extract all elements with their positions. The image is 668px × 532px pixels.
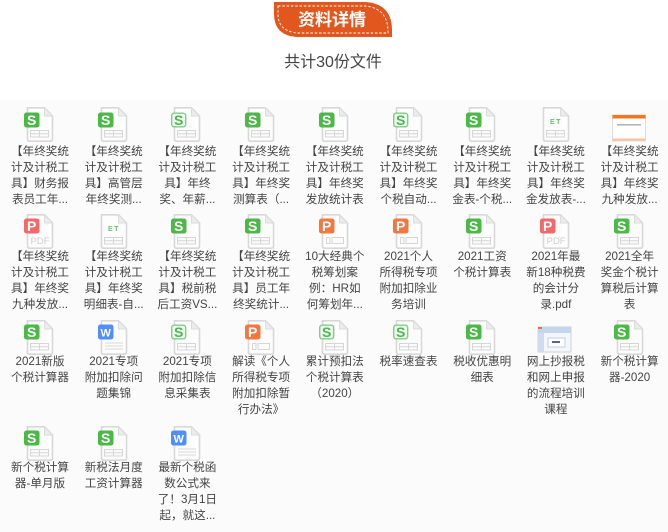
- file: row 2 column 3: [157, 214, 217, 311]
- file: row 2 column 1: 计及计税工: [11, 266, 69, 279]
- file: row 2 column 2: ET: [108, 226, 120, 233]
- file: row 2 column 9: 奖金个税计: [601, 266, 659, 279]
- file: row 3 column 3: 息采集表: [164, 387, 211, 400]
- file: row 2 column 4: [232, 214, 290, 311]
- file: row 1 column 3: 奖、年薪...: [159, 193, 215, 206]
- file: row 1 column 4: 测算表（...: [233, 193, 289, 206]
- file: row 2 column 9: S: [617, 218, 626, 234]
- file: row 3 column 9: [601, 320, 659, 384]
- file: row 3 column 5: 个税计算表: [306, 371, 364, 384]
- file: row 4 column 1: 新个税计算: [11, 461, 69, 474]
- file: row 2 column 7: 个税计算表: [453, 266, 511, 279]
- file: row 3 column 7: 细表: [471, 371, 494, 384]
- file: row 1 column 9: 【年终奖统: [601, 145, 659, 158]
- file: row 2 column 6: 务培训: [391, 298, 426, 311]
- file: row 2 column 3: 【年终奖统: [158, 250, 216, 263]
- file: row 3 column 4: [232, 320, 290, 416]
- file: row 1 column 4: 【年终奖统: [232, 145, 290, 158]
- file: row 2 column 9: 2021全年: [605, 250, 654, 263]
- file: row 1 column 9: [601, 114, 659, 206]
- file: row 1 column 5: S: [322, 112, 331, 128]
- file: row 2 column 1: 具】年终奖: [11, 282, 69, 295]
- file: row 2 column 8: PDF: [546, 236, 566, 247]
- file: row 3 column 5: S: [322, 324, 331, 340]
- file: row 2 column 7: S: [469, 218, 479, 234]
- file: row 3 column 3: S: [174, 324, 184, 340]
- file: row 2 column 1: 九种发放...: [12, 298, 68, 311]
- subtitle: 共计30份文件: [284, 54, 382, 71]
- file: row 3 column 8: 网上抄报税: [527, 355, 585, 368]
- banner heading: [274, 2, 392, 37]
- file: row 1 column 9: 具】年终奖: [601, 177, 659, 190]
- file: row 1 column 8: 金发放表-...: [526, 193, 586, 206]
- file: row 3 column 7: 税收优惠明: [453, 355, 511, 368]
- file: row 2 column 4: 具】员工年: [232, 282, 290, 295]
- file: row 2 column 8: 新18种税费: [526, 266, 586, 279]
- file: row 1 column 5: 发放统计表: [306, 193, 364, 206]
- file: row 1 column 1: 具】财务报: [11, 177, 69, 190]
- file: row 3 column 4: P: [248, 324, 257, 340]
- file: row 2 column 7: [453, 214, 511, 279]
- file: row 1 column 5: [306, 107, 364, 206]
- file: row 2 column 8: 的会计分: [533, 282, 579, 295]
- file: row 1 column 3: [158, 107, 216, 206]
- file: row 1 column 6: 具】年终奖: [380, 177, 437, 190]
- file: row 2 column 8: P: [543, 218, 552, 234]
- file: row 2 column 2: 具】年终奖: [85, 282, 143, 295]
- file: row 2 column 1: PDF: [30, 236, 50, 247]
- file: row 1 column 9: 九种发放...: [602, 193, 658, 206]
- file: row 2 column 4: S: [248, 218, 257, 234]
- file: row 2 column 8: 2021年最: [531, 250, 580, 263]
- file: row 1 column 6: 【年终奖统: [380, 145, 437, 158]
- file: row 3 column 3: 2021专项: [163, 355, 212, 368]
- file: row 2 column 4: 计及计税工: [232, 266, 290, 279]
- file: row 3 column 8: 的流程培训: [527, 387, 585, 400]
- file: row 1 column 7: S: [469, 112, 479, 128]
- file: row 2 column 1: P: [27, 218, 36, 234]
- file: row 2 column 6: P: [396, 218, 405, 234]
- file: row 4 column 3: 起，就这...: [159, 509, 215, 522]
- file: row 3 column 2: 2021专项: [89, 355, 138, 368]
- file: row 4 column 2: S: [101, 430, 110, 446]
- file: row 3 column 9: 新个税计算: [601, 355, 659, 368]
- file: row 2 column 5: 10大经典个: [305, 250, 364, 263]
- file: row 4 column 3: 了！3月1日: [158, 493, 217, 506]
- file: row 3 column 2: 附加扣除问: [85, 371, 143, 384]
- file: row 1 column 4: 计及计税工: [232, 161, 290, 174]
- file: row 3 column 3: 附加扣除信: [158, 371, 216, 384]
- file: row 2 column 1: 【年终奖统: [11, 250, 69, 263]
- file: row 2 column 8: 录.pdf: [540, 298, 571, 311]
- file: row 3 column 2: 题集锦: [96, 387, 131, 400]
- file: row 3 column 1: 个税计算器: [11, 371, 69, 384]
- file: row 1 column 7: 金表-个税...: [452, 193, 512, 206]
- file: row 1 column 2: 年终奖测...: [86, 193, 142, 206]
- file: row 3 column 7: S: [469, 324, 479, 340]
- file: row 1 column 2: S: [101, 112, 110, 128]
- file: row 3 column 5: [306, 320, 364, 400]
- file: row 3 column 1: S: [27, 324, 36, 340]
- file: row 3 column 7: [453, 320, 511, 384]
- file: row 1 column 9: 计及计税工: [601, 161, 659, 174]
- file: row 3 column 6: [380, 320, 437, 368]
- file: row 1 column 4: S: [248, 112, 257, 128]
- file: row 4 column 3: 数公式来: [164, 477, 211, 490]
- file: row 1 column 8: 具】年终奖: [527, 177, 585, 190]
- file: row 3 column 8: [527, 326, 585, 416]
- file: row 2 column 3: 计及计税工: [158, 266, 216, 279]
- file: row 1 column 3: 【年终奖统: [158, 145, 216, 158]
- file: row 2 column 8: [526, 214, 586, 311]
- file: row 1 column 1: 表员工年...: [12, 193, 68, 206]
- file: row 3 column 5: 累计预扣法: [306, 355, 364, 368]
- file: row 1 column 3: S: [174, 112, 184, 128]
- file: row 2 column 5: 何筹划年...: [307, 298, 363, 311]
- file: row 3 column 8: 课程: [544, 403, 567, 416]
- file: row 2 column 5: P: [322, 218, 331, 234]
- file: row 1 column 6: 个税自动...: [380, 193, 437, 206]
- file: row 2 column 7: 2021工资: [458, 250, 507, 263]
- file: row 3 column 6: 税率速查表: [380, 355, 437, 368]
- file: row 1 column 3: 具】年终: [164, 177, 211, 190]
- file: row 2 column 4: 【年终奖统: [232, 250, 290, 263]
- file: row 1 column 8: 计及计税工: [527, 161, 585, 174]
- file: row 3 column 9: 器-2020: [609, 371, 650, 384]
- file: row 3 column 6: S: [396, 324, 405, 340]
- file: row 2 column 1: [11, 214, 69, 311]
- file: row 2 column 6: 附加扣除业: [380, 282, 437, 295]
- file: row 2 column 6: 所得税专项: [380, 266, 437, 279]
- file: row 2 column 5: 税筹划案: [312, 266, 358, 279]
- file: row 4 column 3: [158, 426, 217, 522]
- file: row 1 column 7: 【年终奖统: [453, 145, 511, 158]
- file: row 3 column 9: S: [617, 324, 626, 340]
- file: row 4 column 3: W: [174, 434, 185, 446]
- file: row 2 column 9: 算税后计算: [601, 282, 659, 295]
- file: row 2 column 6: 2021个人: [384, 250, 433, 263]
- file: row 2 column 5: 例：HR如: [309, 282, 361, 295]
- file: row 4 column 1: S: [27, 430, 36, 446]
- file: row 2 column 9: [601, 214, 659, 311]
- file: row 3 column 4: 行办法》: [238, 403, 284, 416]
- file: row 4 column 3: 最新个税函: [158, 461, 216, 474]
- file: row 2 column 3: 后工资VS...: [157, 298, 217, 311]
- file: row 1 column 6: 计及计税工: [380, 161, 437, 174]
- file: row 1 column 7: [452, 107, 512, 206]
- file: row 1 column 5: 【年终奖统: [306, 145, 364, 158]
- file: row 1 column 8: ET: [550, 119, 562, 126]
- file: row 1 column 3: 计及计税工: [158, 161, 216, 174]
- file: row 2 column 2: 明细表-自...: [84, 298, 144, 311]
- file: row 2 column 5: [305, 214, 364, 311]
- file: row 2 column 3: 具】税前税: [158, 282, 216, 295]
- file: row 1 column 7: 计及计税工: [453, 161, 511, 174]
- file: row 1 column 6: [380, 107, 437, 206]
- file: row 2 column 2: 计及计税工: [85, 266, 143, 279]
- file: row 1 column 7: 具】年终奖: [453, 177, 511, 190]
- file: row 4 column 1: 器-单月版: [15, 477, 65, 490]
- file: row 1 column 1: 计及计税工: [11, 161, 69, 174]
- file: row 3 column 2: [85, 320, 143, 400]
- file: row 4 column 2: [85, 426, 143, 490]
- file: row 1 column 1: 【年终奖统: [11, 145, 69, 158]
- file: row 1 column 2: 计及计税工: [85, 161, 143, 174]
- file: row 2 column 9: 表: [624, 298, 635, 311]
- file: row 1 column 1: S: [27, 112, 36, 128]
- file: row 1 column 1: [11, 107, 69, 206]
- file: row 3 column 5: （2020）: [310, 387, 359, 400]
- file: row 3 column 3: [158, 320, 216, 400]
- file: row 1 column 8: 【年终奖统: [527, 145, 585, 158]
- file: row 4 column 1: [11, 426, 69, 490]
- file: row 1 column 2: [85, 107, 143, 206]
- file: row 3 column 1: [11, 320, 69, 384]
- file: row 1 column 5: 计及计税工: [306, 161, 364, 174]
- file: row 1 column 8: [526, 107, 586, 206]
- file: row 2 column 6: [380, 214, 437, 311]
- file: row 2 column 2: 【年终奖统: [85, 250, 143, 263]
- file: row 4 column 2: 新税法月度: [85, 461, 143, 474]
- file: row 3 column 1: 2021新版: [16, 355, 64, 368]
- file: row 3 column 4: 附加扣除暂: [232, 387, 290, 400]
- file: row 3 column 4: 所得税专项: [232, 371, 290, 384]
- file: row 1 column 4: 具】年终奖: [232, 177, 290, 190]
- file: row 1 column 2: 【年终奖统: [85, 145, 143, 158]
- file: row 1 column 2: 具】高管层: [85, 177, 143, 190]
- file: row 2 column 2: [84, 214, 144, 311]
- file: row 1 column 4: [232, 107, 290, 206]
- file: row 3 column 2: W: [100, 328, 111, 340]
- file: row 4 column 2: 工资计算器: [85, 477, 143, 490]
- file: row 2 column 4: 终奖统计...: [233, 298, 289, 311]
- banner heading: 资料详情: [298, 10, 366, 30]
- file: row 1 column 6: S: [396, 112, 405, 128]
- file: row 2 column 3: S: [174, 218, 184, 234]
- file: row 3 column 8: 和网上申报: [527, 371, 585, 384]
- file: row 3 column 4: 解读《个人: [232, 355, 290, 368]
- file: row 1 column 5: 具】年终奖: [306, 177, 364, 190]
